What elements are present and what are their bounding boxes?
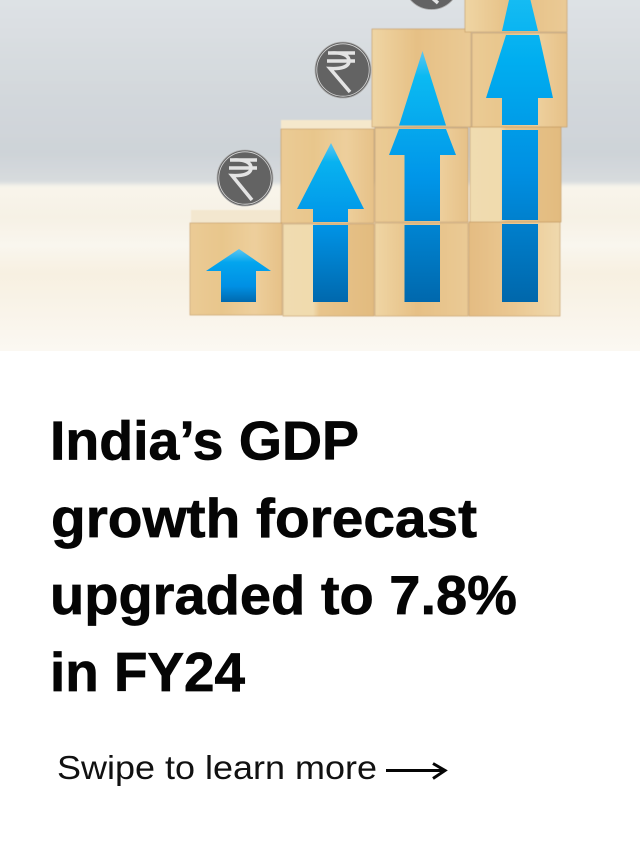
icon: rupee coin middle (315, 42, 371, 98)
title: upgraded to 7.8% (50, 564, 517, 626)
arrow: swipe right (386, 764, 445, 778)
title: in FY24 (50, 641, 245, 703)
arrow: fourth step (486, 0, 553, 302)
title (50, 410, 517, 703)
arrow: third step (389, 51, 456, 302)
icon: rupee coin top (410, 0, 453, 10)
photo backdrop: wall and table (0, 0, 640, 351)
wooden blocks staircase (190, 0, 567, 316)
title: growth forecast (51, 487, 477, 549)
photo: wooden blocks with arrows (0, 0, 640, 351)
arrow: second step (297, 143, 364, 302)
icon: rupee coin low (217, 150, 273, 206)
arrow: first step (206, 249, 271, 302)
title: India’s GDP (50, 410, 359, 472)
swipe prompt text: Swipe to learn more (57, 749, 377, 786)
